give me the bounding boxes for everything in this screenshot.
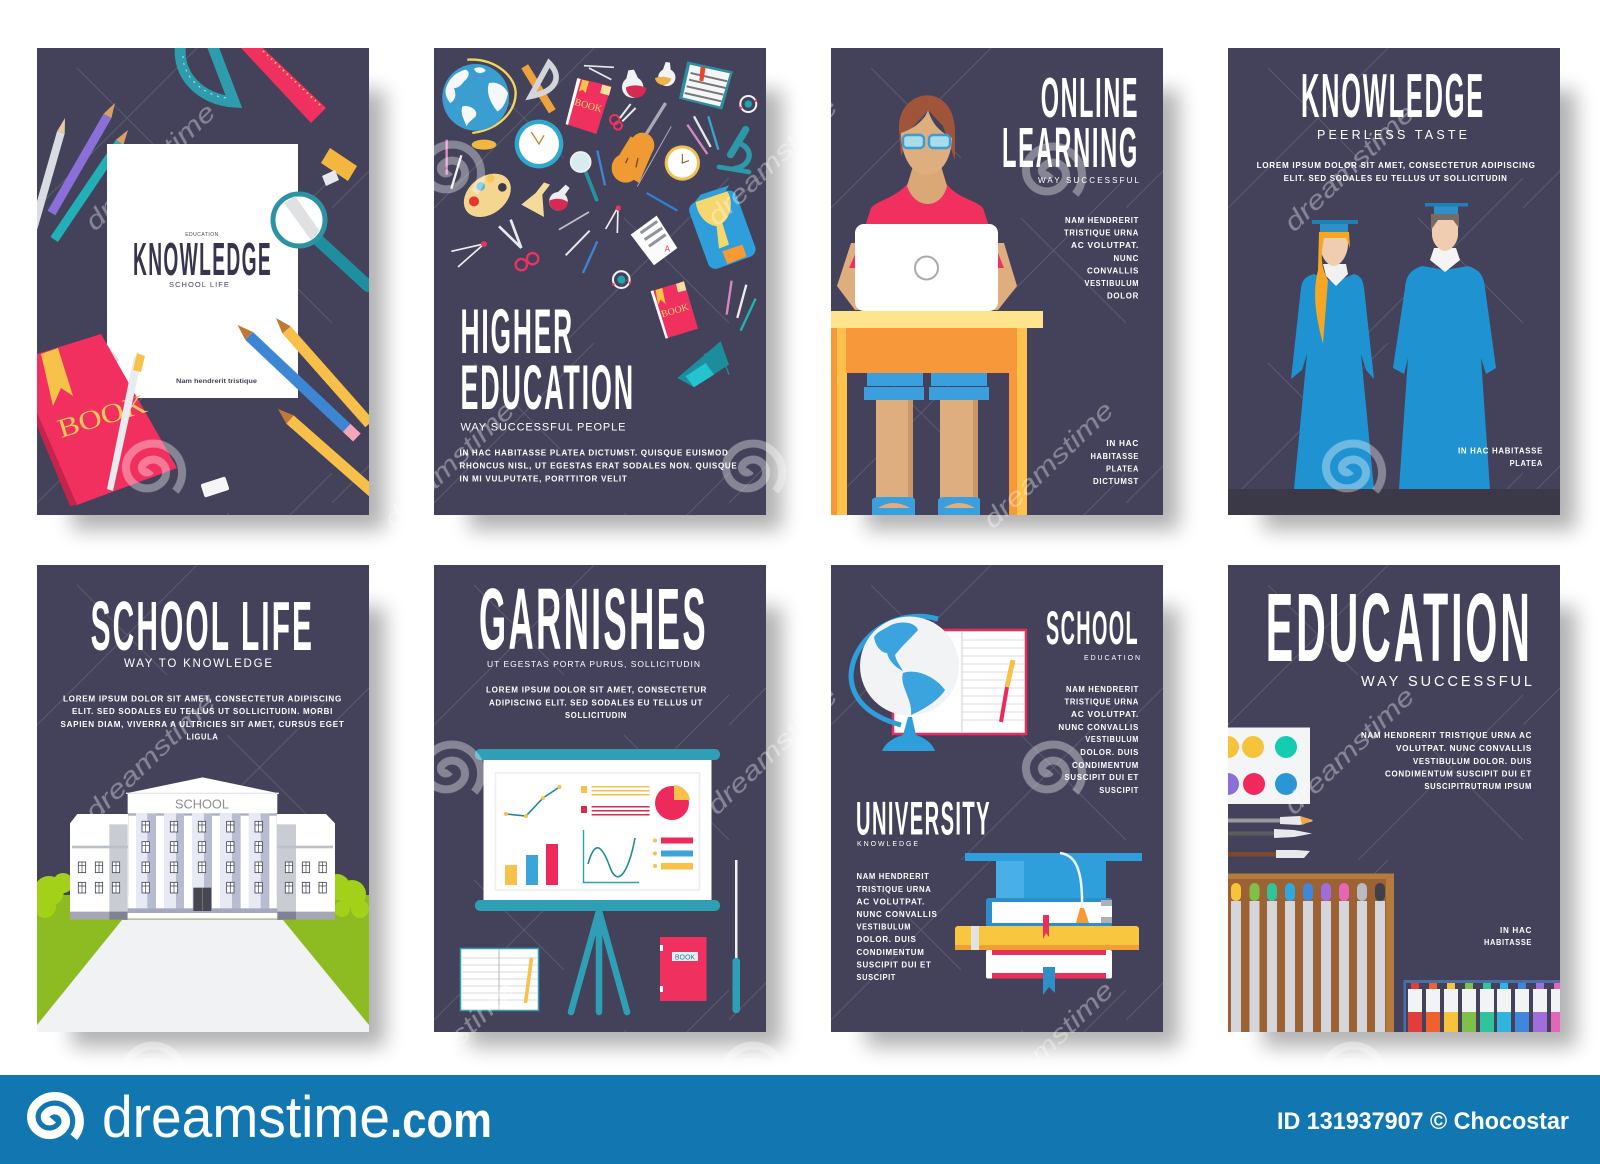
watermark wordmarks: dreamstime	[700, 92, 843, 231]
body text lower: HABITASSE	[1090, 452, 1139, 461]
icon: paint sticks	[446, 140, 448, 175]
figure: male graduate	[1393, 203, 1496, 489]
icon: palette	[455, 165, 519, 226]
icon: yellow pencil lower	[278, 409, 369, 496]
banner domain: .com	[390, 1094, 492, 1148]
icon: pencil teal right	[741, 299, 756, 331]
body text left: CONDIMENTUM	[856, 948, 924, 957]
paint brushes	[1228, 816, 1313, 858]
central block	[128, 812, 277, 920]
body text lower	[1458, 446, 1543, 468]
icon: scissors large	[499, 220, 538, 270]
pie chart	[655, 785, 690, 820]
globe	[851, 616, 959, 751]
icon: open book	[679, 61, 733, 110]
curve chart	[584, 830, 639, 882]
body text lower	[1484, 926, 1532, 947]
body text right: SUSCIPIT DUI ET	[1064, 773, 1139, 782]
body text upper: NAM HENDRERIT	[1065, 216, 1139, 225]
body text: LOREM IPSUM DOLOR SIT AMET, CONSECTETUR ADIPISCING	[63, 694, 342, 704]
body text left: SUSCIPIT DUI ET	[856, 960, 932, 969]
panel: school university	[831, 565, 1163, 1032]
pediment and entablature	[126, 777, 279, 813]
body text	[486, 686, 707, 720]
body text right: AC VOLUTPAT.	[1071, 710, 1139, 719]
icon: white stick	[694, 116, 711, 147]
image id credit: ID 131937907 © Chocostar	[1277, 1108, 1569, 1135]
icon: magnifier	[273, 194, 368, 286]
icon: white stick middle	[566, 231, 590, 255]
body text right	[1058, 685, 1139, 795]
icon: backpack	[687, 185, 758, 271]
laptop	[855, 224, 998, 311]
tube colours	[1408, 983, 1565, 1032]
watermark wordmarks: dreamstime	[976, 395, 1119, 534]
body text right: TRISTIQUE URNA	[1064, 697, 1139, 706]
body text: ADIPISCING ELIT. SED SODALES EU TELLUS UT	[489, 698, 703, 707]
body text upper: VESTIBULUM DOLOR. DUIS	[1413, 757, 1532, 766]
body text upper: TRISTIQUE URNA	[1064, 229, 1139, 238]
body text right: DOLOR. DUIS	[1080, 748, 1139, 757]
red book	[660, 937, 706, 1001]
icon: sharpener	[321, 148, 357, 181]
icon: ruler	[241, 48, 326, 123]
body text: LOREM IPSUM DOLOR SIT AMET, CONSECTETUR	[486, 686, 707, 694]
body text: IN MI VULPUTATE, PORTTITOR VELIT	[460, 474, 628, 484]
icon: purple pencil	[48, 101, 119, 215]
body text right: NUNC CONVALLIS	[1058, 723, 1139, 732]
figure: student at laptop	[831, 95, 1043, 515]
bar chart	[505, 844, 558, 885]
icon: pencils trio	[687, 125, 707, 154]
paper subtitle: SCHOOL LIFE	[169, 282, 230, 289]
panel: education art supplies	[1217, 565, 1565, 1032]
body text left: NUNC CONVALLIS	[856, 910, 938, 919]
watermark wordmarks: dreamstime	[78, 97, 221, 236]
body text lower	[1090, 439, 1139, 486]
watermark wordmarks: dreamstime	[377, 395, 520, 534]
book stack	[955, 898, 1139, 995]
body text upper: SUSCIPITRUTRUM IPSUM	[1424, 782, 1532, 791]
panel: knowledge cover: KNOWLEDGE	[133, 233, 272, 285]
legs	[876, 400, 978, 500]
panel: higher education: EDUCATION	[460, 353, 635, 423]
road	[37, 920, 369, 1032]
icon: pen on book	[107, 353, 145, 491]
watermark wordmarks: dreamstime	[1277, 681, 1420, 820]
body text lower: IN HAC	[1500, 926, 1532, 935]
icon: blue pencil	[234, 321, 361, 441]
watermark wordmarks: dreamstime	[78, 687, 221, 826]
easel legs	[571, 911, 627, 1012]
subtitle: WAY SUCCESSFUL	[1038, 176, 1140, 185]
body text upper: VOLUTPAT. NUNC CONVALLIS	[1396, 744, 1532, 753]
watercolor palette	[1217, 728, 1310, 804]
body text: LIGULA	[186, 732, 218, 742]
icon: sharpener eraser	[322, 170, 339, 186]
body text: ELIT. SED SODALES EU TELLUS UT SOLLICITUDIN	[1284, 174, 1508, 183]
markers	[1231, 883, 1385, 1032]
body text	[460, 448, 738, 484]
body text left: NAM HENDRERIT	[856, 872, 930, 881]
body text upper: CONVALLIS	[1087, 266, 1139, 275]
icon: lower book	[651, 281, 698, 339]
icon: graduation cap	[677, 341, 729, 387]
body text right: VESTIBULUM	[1085, 735, 1139, 744]
banner logo	[24, 1086, 90, 1151]
school building	[70, 777, 335, 920]
body text lower: IN HAC	[1106, 439, 1139, 448]
icon: gold clock	[665, 145, 700, 181]
body text	[60, 694, 344, 742]
student face	[901, 110, 952, 175]
icon: gray stick	[559, 212, 589, 230]
panel: online learning	[831, 48, 1163, 515]
body text left: SUSCIPIT	[856, 973, 896, 982]
tube bodies	[1408, 989, 1565, 1032]
graduation cap on books	[965, 853, 1142, 898]
icon: paint stick white	[451, 155, 461, 189]
legend bars	[653, 838, 693, 870]
icon: scissors	[610, 104, 636, 130]
text: LEARNING	[1002, 116, 1139, 180]
icon: blue pencil diagonal	[647, 193, 677, 211]
icon: book	[37, 334, 177, 506]
body text upper: CONDIMENTUM SUSCIPIT DUI ET	[1385, 769, 1532, 778]
icon: compass	[606, 205, 621, 233]
watermark wordmarks: dreamstime	[700, 681, 843, 820]
icon: test paper	[631, 216, 677, 265]
card shadows	[72, 90, 1576, 1047]
panel: school university: SCHOOL	[1046, 601, 1139, 654]
body text upper: DOLOR	[1107, 292, 1139, 301]
icon: compass left	[451, 241, 487, 267]
watermark wordmarks: dreamstime	[976, 975, 1119, 1114]
body text upper: NUNC	[1114, 254, 1139, 263]
icon: ruler and protractor	[525, 63, 556, 111]
icon: round flask	[549, 185, 570, 211]
student shirt	[849, 183, 1004, 268]
door	[193, 888, 211, 911]
body text left: DOLOR. DUIS	[856, 935, 916, 944]
figure: female graduate	[1291, 220, 1374, 489]
subtitle: knowledge: KNOWLEDGE	[857, 841, 918, 848]
panel: higher education: HIGHER	[460, 297, 574, 367]
icon: small eraser	[200, 476, 230, 498]
body text left: AC VOLUTPAT.	[856, 898, 925, 906]
icon: blue pen	[597, 151, 605, 185]
paint tube tray	[1404, 980, 1565, 1032]
panel: garnishes	[434, 565, 766, 1032]
windows	[78, 821, 326, 893]
icon: blue pencil middle	[583, 241, 597, 273]
body text lower: PLATEA	[1106, 465, 1139, 474]
paper footer: Nam hendrerit tristique	[176, 379, 258, 385]
watermark wordmarks: dreamstime	[1277, 98, 1420, 237]
body text: SAPIEN DIAM, VIVERRA A ULTRICIES SIT AMET, CURSUS EGET	[60, 720, 344, 729]
paper eyebrow: EDUCATION	[185, 232, 219, 238]
notebook	[460, 948, 538, 1010]
panel: school university: UNIVERSITY	[856, 792, 991, 844]
watermark wordmarks	[78, 92, 1420, 1114]
desk	[831, 311, 1043, 515]
body text: RHONCUS NISL, UT EGESTAS ERAT SODALES NON. QUISQUE	[460, 462, 738, 470]
watermark spirals	[117, 133, 1394, 1109]
body text lower: DICTUMST	[1093, 477, 1139, 486]
icon: lower book: BOOK	[660, 302, 690, 320]
banner wordmark: dreamstime	[102, 1085, 390, 1150]
icon: book: BOOK	[54, 388, 150, 444]
icon: magnifier small	[571, 152, 597, 200]
body text: ELIT. SED SODALES EU TELLUS UT SOLLICITUDIN. MORBI	[72, 707, 333, 716]
body text left: VESTIBULUM	[856, 922, 911, 932]
red book: BOOK	[675, 954, 695, 962]
bushes	[34, 873, 369, 918]
icon: conical flask	[521, 182, 550, 217]
icon: teal pencil	[50, 127, 132, 242]
school supplies collage	[442, 60, 758, 387]
panel: knowledge graduates	[1228, 48, 1560, 515]
icon: globe	[442, 60, 516, 150]
icon: microscope	[719, 130, 749, 172]
banner	[0, 1075, 1600, 1164]
legend lines red	[581, 806, 650, 816]
watermark wordmarks: dreamstime	[377, 975, 520, 1114]
paper sheet	[107, 144, 298, 398]
body text lower: HABITASSE	[1484, 938, 1532, 947]
body text	[1257, 161, 1536, 183]
subtitle: education: EDUCATION	[1084, 655, 1140, 662]
body text: LOREM IPSUM DOLOR SIT AMET, CONSECTETUR ADIPISCING	[1257, 161, 1536, 170]
left wing	[70, 814, 128, 920]
lawn	[37, 895, 369, 1032]
icon: dividers	[584, 66, 614, 80]
shorts	[864, 373, 989, 400]
panel: knowledge cover	[29, 42, 376, 515]
panel: online learning: ONLINE	[1041, 66, 1139, 130]
body text lower: PLATEA	[1510, 459, 1543, 468]
icon: violin	[612, 103, 671, 186]
subtitle: WAY SUCCESSFUL PEOPLE	[460, 422, 626, 434]
panel: school life: SCHOOL LIFE	[91, 587, 314, 665]
open notebook	[893, 630, 1026, 734]
body text: SOLLICITUDIN	[565, 711, 627, 720]
subtitle: UT EGESTAS PORTA PURUS, SOLLICITUDIN	[487, 659, 700, 669]
body text left: TRISTIQUE URNA	[856, 885, 932, 894]
subtitle: WAY SUCCESSFUL	[1361, 674, 1532, 690]
icon: red book	[566, 78, 611, 134]
icon: atom	[739, 96, 757, 112]
student glasses	[903, 135, 950, 148]
icon: white pencil	[37, 118, 65, 230]
icon: red book: BOOK	[573, 97, 604, 115]
body text left	[856, 872, 938, 982]
icon: wall clock	[515, 120, 563, 168]
icon: pencil white right	[737, 285, 746, 318]
panel: garnishes: GARNISHES	[479, 571, 708, 668]
line chart	[504, 785, 562, 818]
icon: pencil pink right	[727, 281, 732, 315]
subtitle: PEERLESS TASTE	[1317, 128, 1467, 142]
student arms	[837, 243, 1017, 310]
marker box	[1228, 874, 1394, 1032]
body text upper: VESTIBULUM	[1084, 279, 1139, 288]
body text lower: IN HAC HABITASSE	[1458, 446, 1543, 456]
subtitle: WAY TO KNOWLEDGE	[124, 658, 272, 670]
shoes	[872, 497, 980, 515]
icon: round flask red	[622, 70, 646, 98]
icon: round flask yellow	[655, 62, 675, 86]
body text upper: AC VOLUTPAT.	[1071, 241, 1139, 250]
icon: yellow pencil	[276, 318, 369, 428]
icon: atom lower	[612, 271, 631, 288]
panel: school life	[34, 565, 369, 1032]
tassel	[1060, 853, 1089, 923]
pointer	[732, 860, 740, 1013]
icon: blue stick	[708, 116, 718, 150]
body text upper: NAM HENDRERIT TRISTIQUE URNA AC	[1361, 731, 1532, 740]
whiteboard	[475, 749, 720, 911]
legend lines yellow	[581, 786, 650, 796]
icon: test paper: A	[665, 244, 671, 253]
body text right: SUSCIPIT	[1099, 786, 1139, 795]
panel: higher education	[434, 48, 766, 515]
body text right: NAM HENDRERIT	[1066, 685, 1139, 694]
student hair	[899, 95, 955, 160]
body text right: CONDIMENTUM	[1072, 761, 1139, 770]
right wing	[277, 814, 335, 920]
student neck	[907, 166, 947, 204]
school name: SCHOOL	[175, 797, 229, 811]
body text upper	[1361, 731, 1532, 791]
body text: IN HAC HABITASSE PLATEA DICTUMST. QUISQUE EUISMOD	[460, 448, 728, 458]
floor	[1228, 489, 1560, 515]
body text upper	[1064, 216, 1139, 301]
icon: protractor	[180, 42, 234, 102]
